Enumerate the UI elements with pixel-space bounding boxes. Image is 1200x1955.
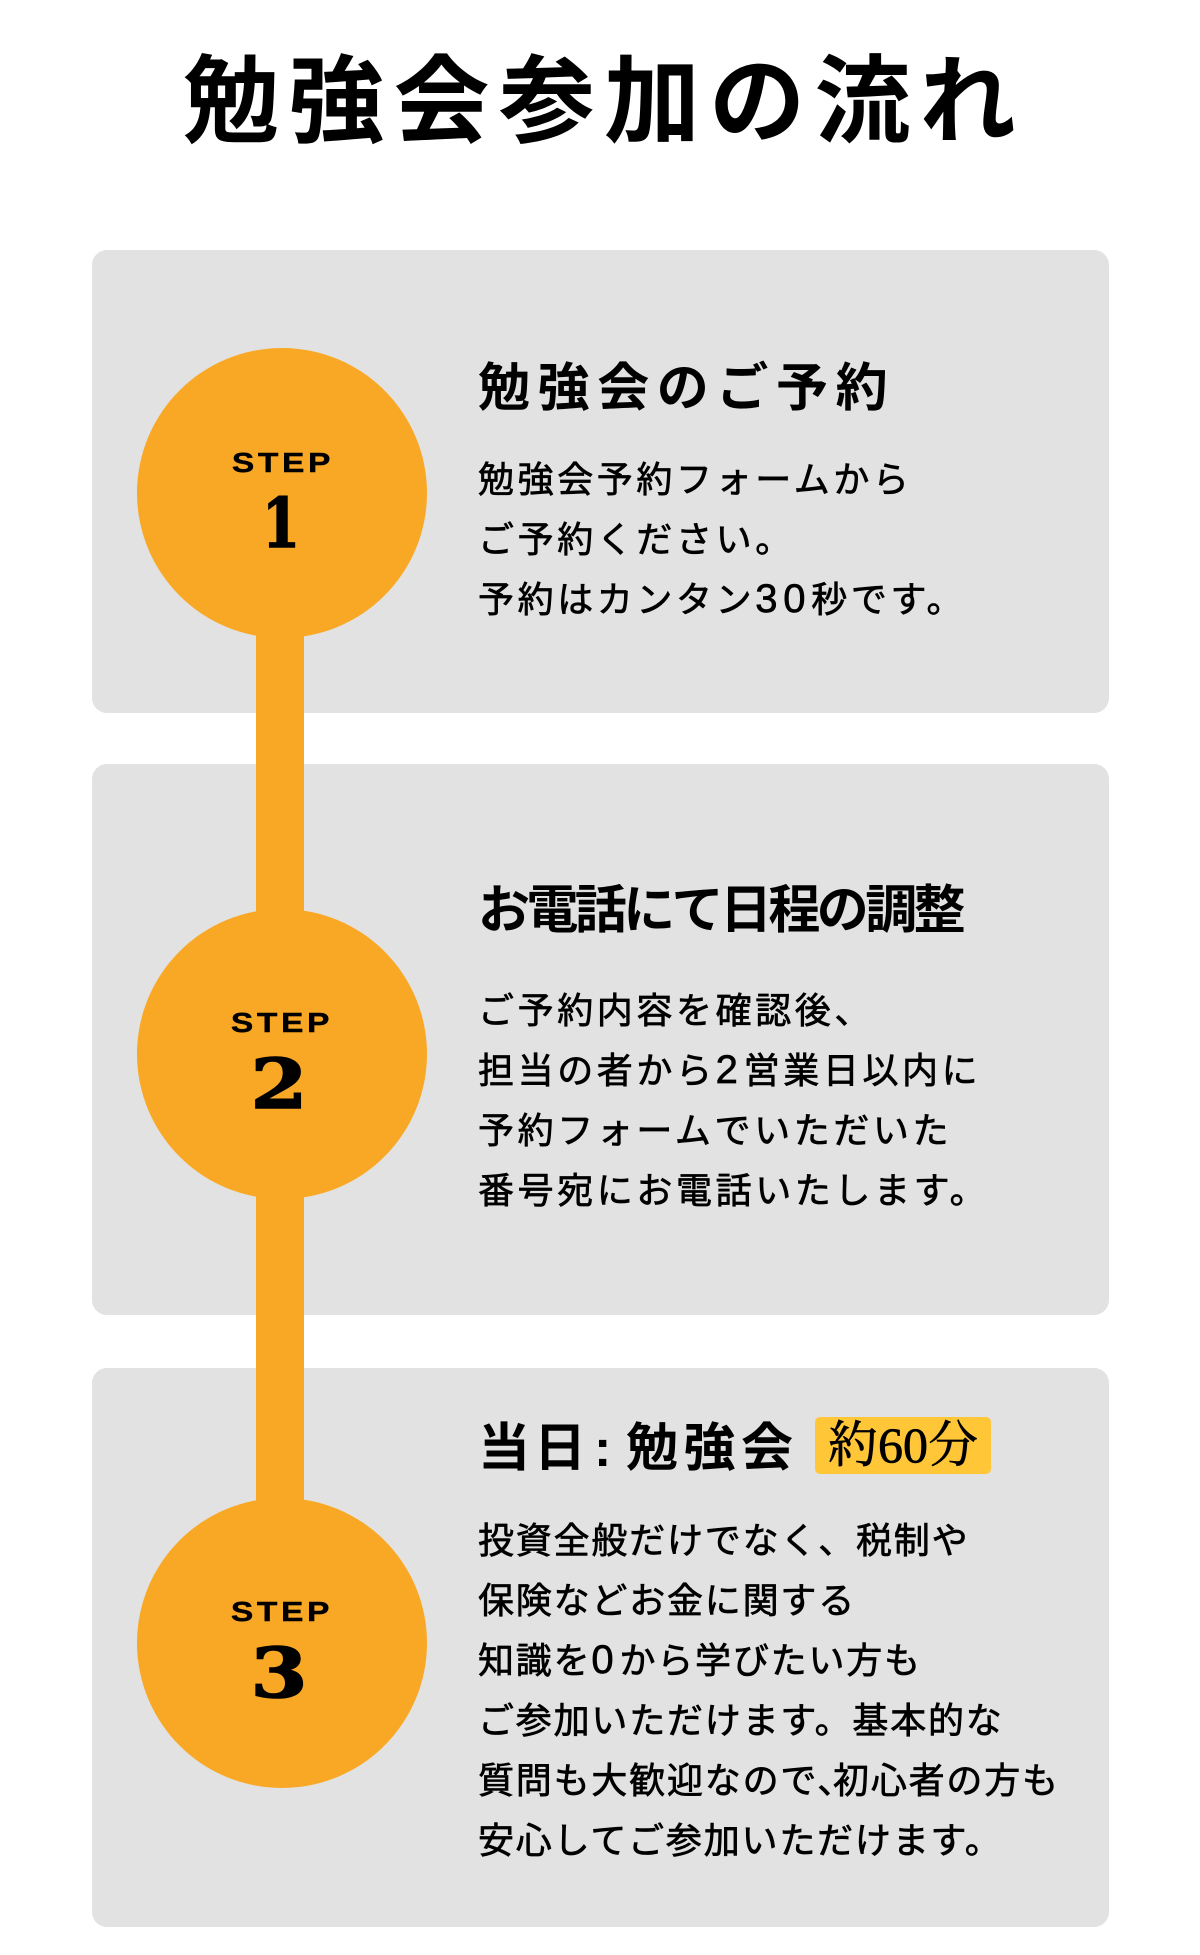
circle: step 1: STEP [232,447,334,478]
circle: step 1: 1 [262,484,300,564]
panel: step 3 card [92,1368,1109,1927]
circle: step 3: 3 [251,1634,307,1714]
heading: step 3: 勉強会 [626,1420,799,1478]
text: step 3: 投資全般だけでなく、税制や 保険などお金に関する 知識を0から学びたい方も ご参加いただけます。基本的な 質問も大歓迎なので､初心者の方も 安心してご参加いただけます。 [478,1520,1060,1861]
text: step 1: 勉強会予約フォームから ご予約ください。 予約はカンタン30秒です。 [478,459,966,621]
circle: step 2: 2 [251,1045,307,1125]
circle: step 2 [137,909,427,1199]
heading: step 3: : [594,1420,619,1478]
badge: about 60 minutes: 約60分 [828,1417,978,1473]
circle: step 3: STEP [231,1596,333,1627]
heading: step 2: お電話にて日程の調整 [478,882,962,940]
circle: step 2: STEP [231,1007,333,1038]
heading: step 3 [478,1420,799,1478]
connector: step 2 to 3 [256,1160,304,1510]
panel: step 2 card [92,764,1109,1315]
heading: step 1: 勉強会のご予約 [478,360,895,418]
panel: step 1 card [92,250,1109,713]
connector: step 1 to 2 [256,600,304,950]
circle: step 1 [137,348,427,638]
heading: step 3: 当日 [478,1420,590,1478]
title: 勉強会参加の流れ [183,49,1025,156]
text: step 2: ご予約内容を確認後、 担当の者から2営業日以内に 予約フォームでいただいた 番号宛にお電話いたします。 [478,990,989,1211]
circle: step 3 [137,1498,427,1788]
